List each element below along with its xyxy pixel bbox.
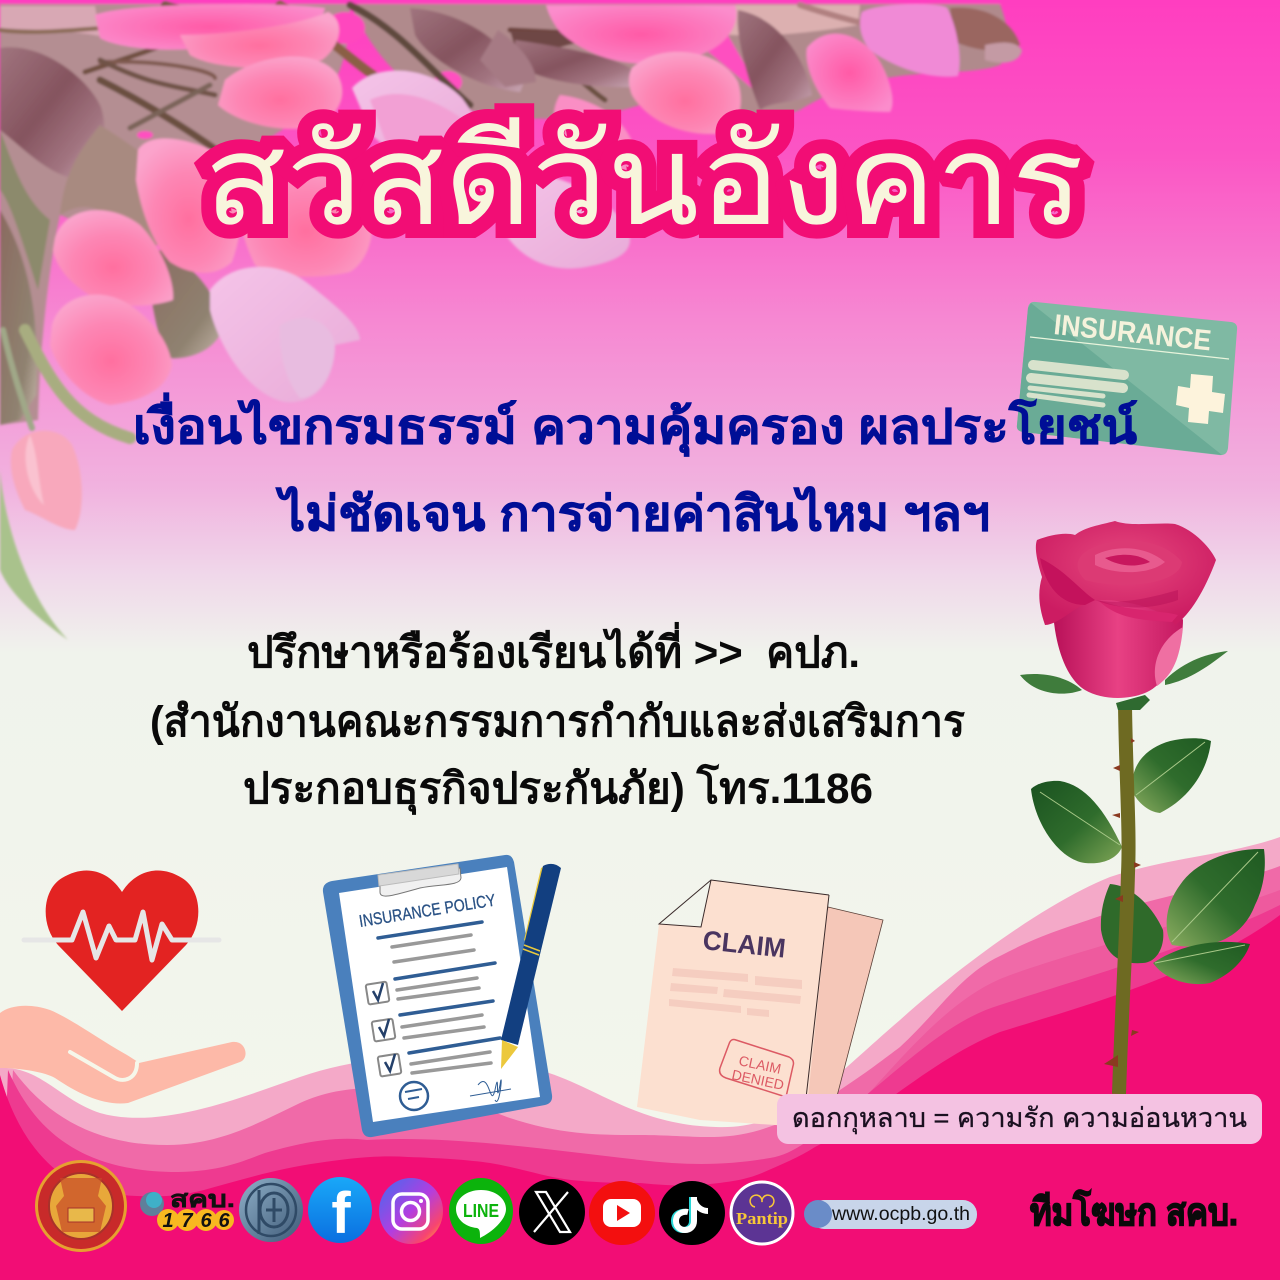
icon: line: LINE (463, 1201, 499, 1221)
flower bouquet (0, 0, 1280, 640)
list lines (378, 922, 500, 1073)
logo: seal (35, 1160, 127, 1252)
icon: rose (1020, 521, 1265, 1094)
icon: x (519, 1179, 585, 1245)
pen (524, 864, 549, 945)
icon: facebook (308, 1177, 372, 1246)
wave layers (0, 837, 1280, 1280)
callout: rose meaning (777, 1094, 1262, 1144)
pink tulips (11, 4, 960, 530)
mauve foliage base (0, 4, 350, 425)
icon: claim documents: CLAIM (737, 1052, 783, 1077)
stamp and signature (400, 1082, 428, 1110)
callout: rose meaning: ดอกกุหลาบ = ความรัก ความอ่อนหวาน (792, 1103, 1247, 1135)
stem (1119, 705, 1129, 1094)
sepals (1020, 674, 1082, 694)
mauve leaves (0, 47, 104, 178)
rose head (1036, 521, 1216, 625)
upper foliage and stems (0, 4, 1008, 160)
icon: insurance policy clipboard (323, 855, 561, 1137)
top bar colour (0, 0, 1280, 4)
heading: insurance issues: เงื่อนไขกรมธรรม์ ความคุ้มครอง ผลประโยชน์ (133, 392, 1138, 457)
icon: line (449, 1178, 513, 1244)
icon: open hand (0, 1006, 246, 1103)
text block: contact: ปรึกษาหรือร้องเรียนได้ที่ >> คปภ. (247, 622, 860, 677)
logo: hotline 1766 (140, 1186, 235, 1232)
icon: heart with pulse (24, 870, 219, 1011)
text block: contact: (สำนักงานคณะกรรมการกำกับและส่งเสริมการ (150, 698, 965, 746)
clip (380, 868, 461, 896)
icon: insurance card: INSURANCE (1052, 309, 1213, 357)
rose bowl (1053, 590, 1183, 698)
logo: hotline 1766: 1 (162, 1210, 174, 1232)
logo: hotline 1766: สคบ. (170, 1186, 235, 1212)
website pill (804, 1200, 977, 1229)
checkboxes (366, 982, 401, 1077)
icon: youtube (589, 1181, 655, 1245)
title: สวัสดีวันอังคาร (204, 110, 1084, 251)
green stems (3, 330, 130, 438)
icon: insurance card (1017, 302, 1237, 455)
heading: insurance issues: ไม่ชัดเจน การจ่ายค่าสินไหม ฯลฯ (275, 485, 990, 541)
icon: pantip (731, 1182, 793, 1244)
website pill: www.ocpb.go.th (831, 1204, 970, 1225)
icon: claim documents (637, 880, 883, 1127)
text block: contact (150, 622, 965, 816)
icon: claim documents: DENIED (730, 1066, 785, 1093)
logo: hotline 1766: 7 (181, 1210, 193, 1232)
heading: insurance issues (133, 392, 1138, 541)
icon: tiktok (659, 1181, 725, 1245)
text block: contact: ประกอบธุรกิจประกันภัย) โทร.1186 (243, 762, 873, 816)
logo: hotline 1766: 6 (218, 1210, 230, 1232)
leaves (1031, 738, 1265, 984)
logo: cpe (239, 1178, 303, 1242)
icon: claim documents: CLAIM (701, 925, 787, 964)
logo: hotline 1766: 6 (200, 1210, 212, 1232)
icon: instagram (379, 1178, 443, 1244)
icon: pantip: Pantip (736, 1209, 788, 1228)
icon: insurance policy clipboard: INSURANCE POLICY (358, 891, 497, 931)
icon: facebook: f (331, 1181, 351, 1246)
long green leaf (0, 470, 68, 640)
team credit: ทีมโฆษก สคบ. (1030, 1189, 1238, 1234)
thorns (1104, 738, 1141, 1067)
